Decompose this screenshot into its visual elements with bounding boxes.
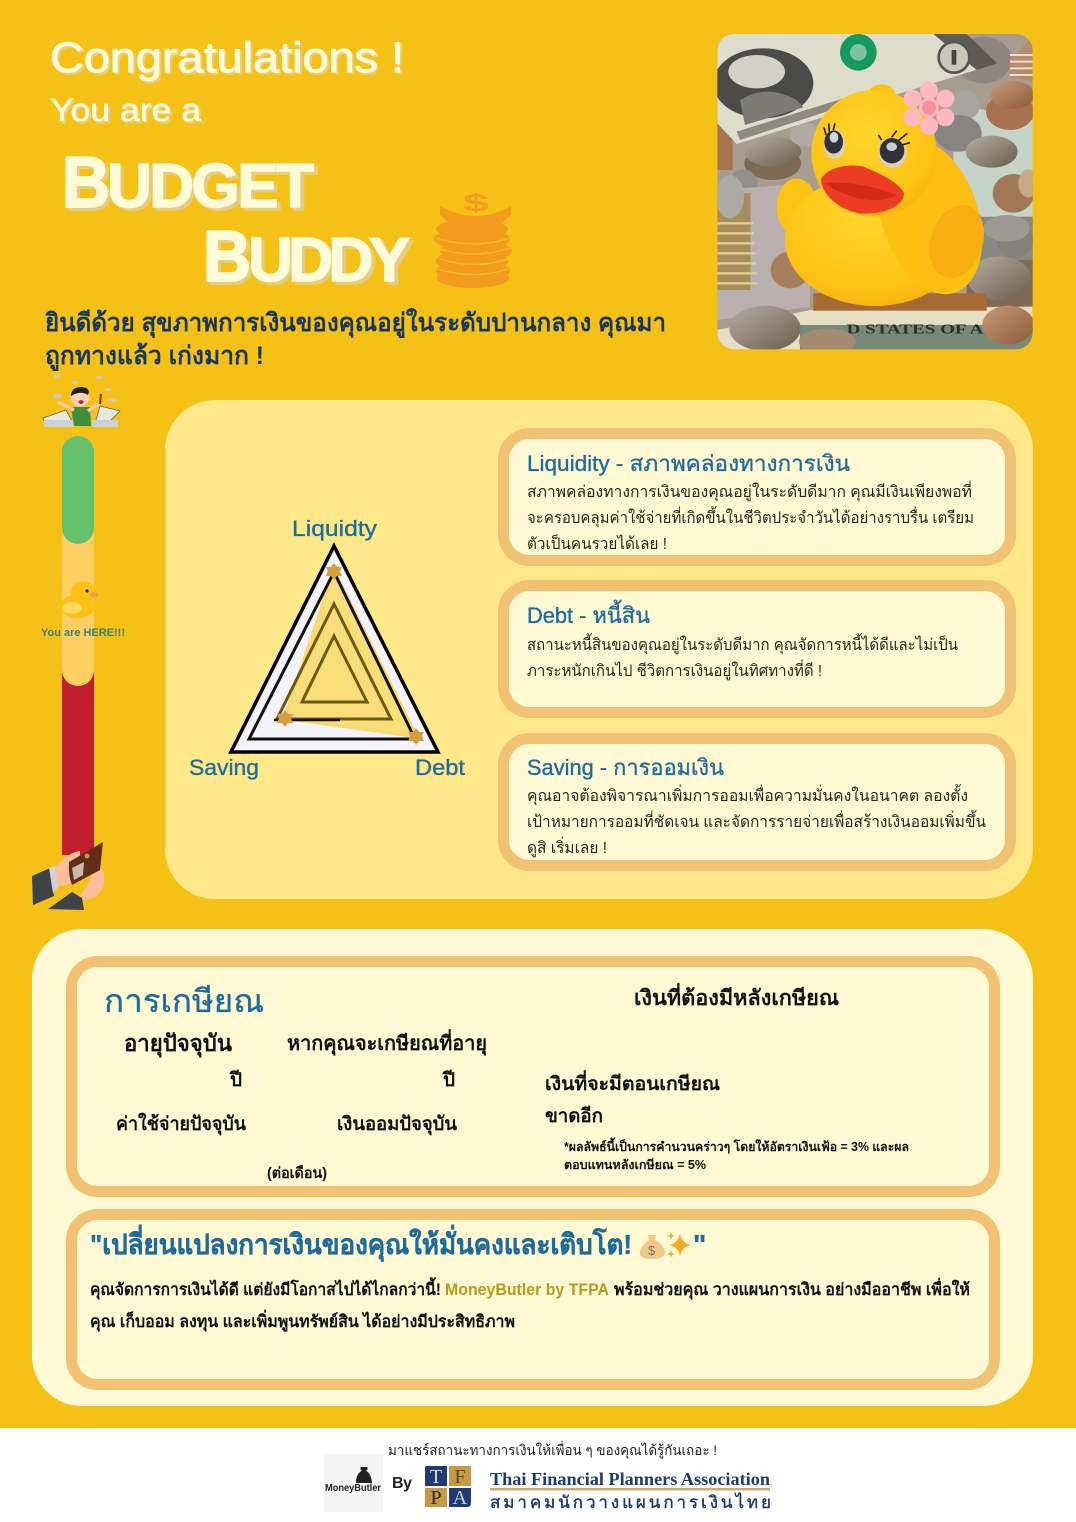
title: buddy: B — [206, 220, 254, 300]
card: call to action: คุณ เก็บออม ลงทุน และเพิ่มพูนทรัพย์สิน ได้อย่างมีประสิทธิภาพ — [90, 1309, 515, 1333]
heading: thai congratulation message: ถูกทางแล้ว เก่งมาก ! — [45, 342, 264, 372]
card: saving — [504, 738, 1010, 866]
label: you are here: You are HERE!!! — [41, 627, 125, 639]
card: retirement: ปี — [229, 1069, 242, 1091]
card: retirement: เงินที่จะมีตอนเกษียณ — [545, 1070, 720, 1095]
title: buddy: B — [203, 217, 251, 297]
chart label: debt: Debt — [415, 755, 465, 780]
heading: thai congratulation message: ยินดีด้วย สุขภาพการเงินของคุณอยู่ในระดับปานกลาง คุณมา — [45, 307, 666, 339]
label: by: By — [392, 1475, 412, 1492]
title: budget: B — [62, 143, 110, 223]
logo: tfpa — [425, 1466, 471, 1509]
subtitle: you are a: You are a — [50, 92, 201, 128]
card: retirement: ปี — [442, 1069, 455, 1091]
card: saving: เป้าหมายการออมที่ชัดเจน และจัดการรายจ่ายเพื่อสร้างเงินออมเพิ่มขึ้น — [527, 810, 986, 831]
logo: tfpa: P — [430, 1487, 442, 1509]
icon: small duck marker — [61, 581, 98, 618]
card: retirement: ค่าใช้จ่ายปัจจุบัน — [116, 1112, 246, 1136]
icon: money bag: $ — [648, 1243, 656, 1258]
card: call to action: คุณจัดการการเงินได้ดี แต่ยังมีโอกาสไปได้ไกลกว่านี้! — [90, 1277, 441, 1300]
card: call to action: พร้อมช่วยคุณ วางแผนการเงิน อย่างมืออาชีพ เพื่อให้ — [614, 1277, 970, 1300]
title: congratulations: Congratulations ! — [50, 34, 404, 82]
card: liquidity: ตัวเป็นคนรวยได้เลย ! — [527, 533, 667, 553]
card: call to action — [72, 1214, 994, 1384]
lower bank note — [717, 293, 1034, 355]
card: debt: ภาระหนักเกินไป ชีวิตการเงินอยู่ในทิศทางที่ดี ! — [527, 659, 822, 681]
footer text: share message: มาแชร์สถานะทางการเงินให้เพื่อน ๆ ของคุณได้รู้กันเถอะ ! — [388, 1441, 717, 1459]
card: retirement: การเกษียณ — [104, 983, 264, 1019]
card: call to action: "เปลี่ยนแปลงการเงินของคุณให้มั่นคงและเติบโต! — [90, 1224, 632, 1262]
logo: tfpa: T — [430, 1466, 442, 1488]
card: retirement — [72, 962, 994, 1192]
card: saving: คุณอาจต้องพิจารณาเพิ่มการออมเพื่อความมั่นคงในอนาคต ลองตั้ง — [527, 784, 968, 806]
bank note top — [713, 34, 997, 144]
logo: moneybutler: MoneyButler — [325, 1482, 381, 1494]
subtitle: you are a: You are a — [52, 94, 203, 130]
icon: coin stack — [434, 189, 512, 288]
title: buddy: UDDY — [251, 229, 414, 298]
card: liquidity: สภาพคล่องทางการเงินของคุณอยู่ในระดับดีมาก คุณมีเงินเพียงพอที่ — [527, 480, 972, 502]
logo text: thai financial planners association: Thai Financial Planners Association — [490, 1469, 770, 1489]
chart label: saving: Saving — [189, 755, 259, 780]
icon: coin stack: $ — [463, 189, 489, 217]
title: budget — [62, 143, 318, 226]
logo: tfpa: F — [454, 1466, 466, 1488]
card: liquidity — [504, 434, 1010, 560]
logo text: thai financial planners association: สมาคมนักวางแผนการเงินไทย — [490, 1492, 771, 1512]
heading: thai congratulation message — [45, 307, 666, 372]
card: saving: Saving - การออมเงิน — [527, 755, 724, 780]
title: budget: UDGET — [110, 155, 318, 224]
chart label: liquidity: Liquidty — [292, 516, 377, 541]
card: retirement: *ผลลัพธ์นี้เป็นการคำนวนคร่าวๆ โดยให้อัตราเงินเฟ้อ = 3% และผล — [564, 1137, 909, 1154]
icon: rich man with money — [43, 375, 120, 427]
title: congratulations: Congratulations ! — [52, 36, 406, 84]
title: buddy — [203, 217, 414, 300]
card: debt: Debt - หนี้สิน — [527, 600, 650, 628]
card: debt: สถานะหนี้สินของคุณอยู่ในระดับดีมาก คุณจัดการหนี้ได้ดีและไม่เป็น — [527, 633, 958, 655]
card: saving: ดูสิ เริ่มเลย ! — [527, 836, 607, 858]
logo text: thai financial planners association — [490, 1469, 771, 1512]
gauge: financial health bar — [62, 436, 94, 855]
card: liquidity: จะครอบคลุมค่าใช้จ่ายที่เกิดขึ้นในชีวิตประจำวันได้อย่างราบรื่น เตรียม — [527, 506, 974, 528]
logo: tfpa: A — [453, 1487, 468, 1509]
footer — [0, 1428, 1076, 1522]
card: retirement: (ต่อเดือน) — [267, 1165, 327, 1182]
card: call to action: " — [693, 1229, 706, 1260]
icon: money bag — [640, 1235, 665, 1259]
icon: hands with empty wallet — [32, 842, 104, 910]
title: budget: UDGET — [107, 152, 314, 221]
radar chart — [189, 516, 465, 780]
photo: rubber duck on money — [713, 34, 1038, 355]
flower — [904, 82, 954, 135]
card: debt — [504, 586, 1010, 712]
title: buddy: UDDY — [248, 226, 410, 295]
lower bank note: D STATES OF A — [847, 322, 983, 337]
card: retirement: ขาดอีก — [545, 1105, 603, 1127]
logo: moneybutler — [324, 1454, 383, 1512]
panel: financial health — [165, 400, 1033, 899]
card: call to action: MoneyButler by TFPA — [445, 1281, 609, 1299]
duck body — [777, 84, 1001, 308]
card: retirement: เงินที่ต้องมีหลังเกษียณ — [634, 982, 840, 1010]
card: retirement: ตอบแทนหลังเกษียณ = 5% — [564, 1158, 706, 1172]
card: liquidity: Liquidity - สภาพคล่องทางการเงิน — [527, 451, 850, 476]
title: budget: B — [65, 146, 113, 226]
icon: sparkles — [667, 1232, 691, 1258]
card: retirement: หากคุณจะเกษียณที่อายุ — [287, 1028, 487, 1056]
panel: retirement and advice — [32, 929, 1033, 1406]
card: retirement: เงินออมปัจจุบัน — [337, 1114, 457, 1136]
card: retirement: อายุปัจจุบัน — [124, 1030, 232, 1058]
scattered coins — [716, 37, 1038, 320]
